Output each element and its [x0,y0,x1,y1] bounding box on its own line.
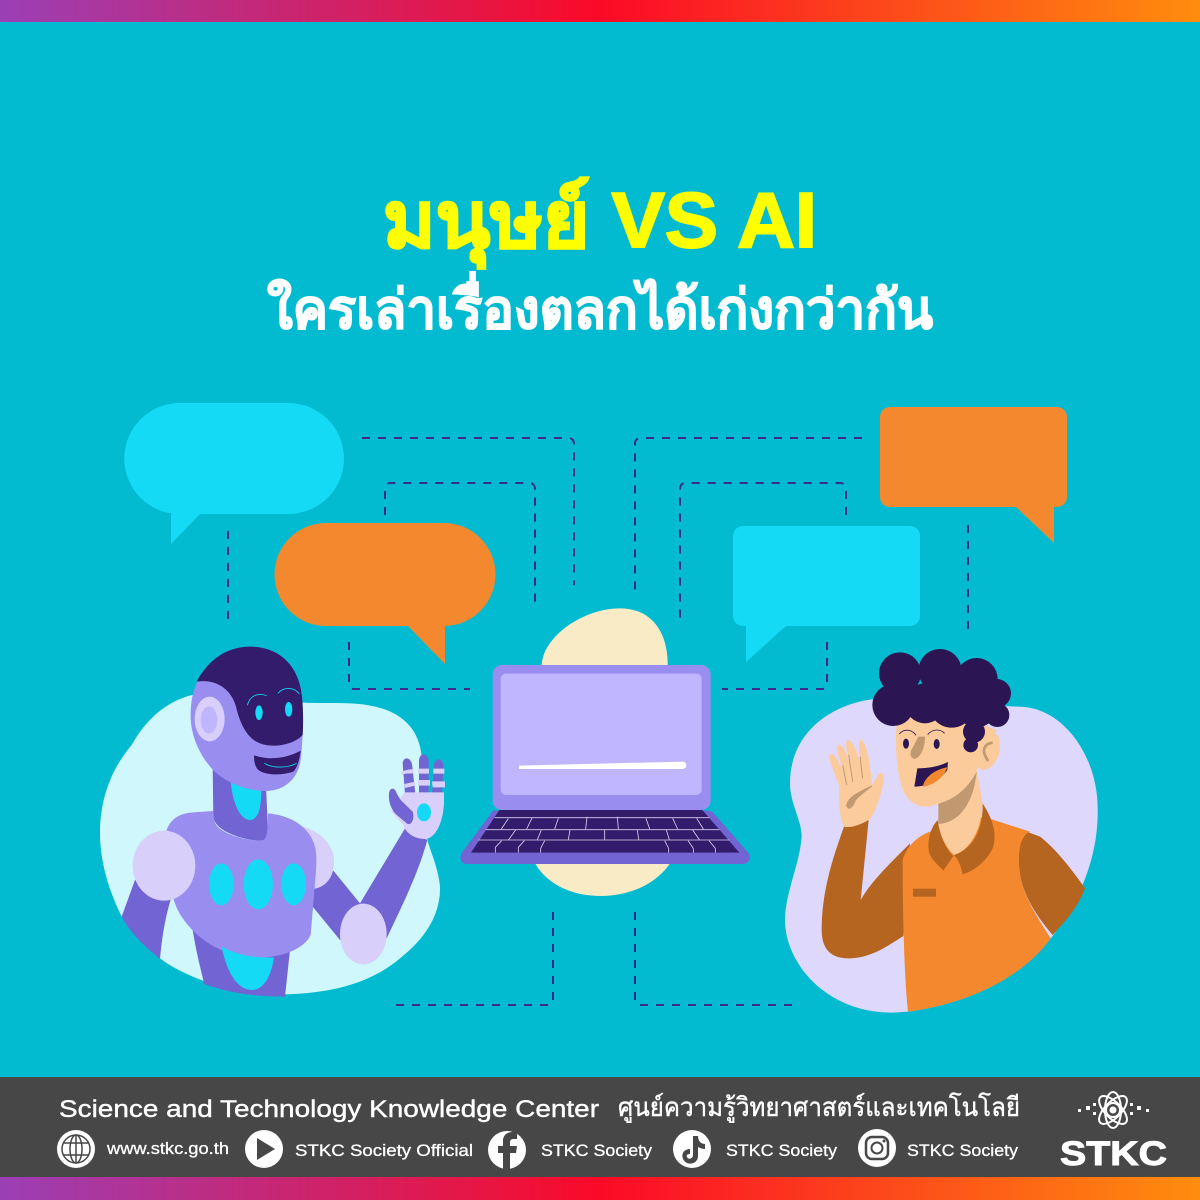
face [896,710,997,807]
pocket [913,889,936,897]
website link [57,1130,229,1168]
tiktok link [673,1130,838,1168]
shoulder right [303,827,334,889]
hair [872,649,1011,752]
instagram link: STKC Society [907,1141,1019,1160]
neck [213,767,268,841]
footer heading thai: ศูนย์ความรู้วิทยาศาสตร์และเทคโนโลยี [618,1092,1020,1123]
keyboard [471,810,739,853]
dark face plate [197,647,303,746]
ear [195,697,225,741]
youtube link: STKC Society Official [295,1141,473,1160]
speech bubble: cyan right [733,526,920,662]
STKC logo: STKC [1060,1135,1167,1173]
chest lights [209,859,306,909]
youtube link [245,1130,473,1168]
inner ear [984,743,993,761]
laptop base [460,811,750,864]
speech bubble: orange right [880,407,1067,543]
robot limbs [122,828,427,997]
laptop screen frame [493,665,711,810]
bottom gradient bar [0,1177,1200,1200]
robot hand [389,754,445,839]
mouth line [264,763,297,767]
brows [899,730,945,735]
robot illustration [100,647,445,997]
laptop illustration [460,608,750,896]
light blob [100,695,440,994]
mouth [254,751,301,774]
palm lines [843,755,872,808]
eyes [255,702,292,720]
neck [938,770,983,855]
laptop screen [501,674,702,795]
cream blob behind laptop [535,608,670,896]
top gradient bar [0,0,1200,22]
tiktok link: STKC Society [726,1141,838,1160]
mouth [914,762,948,787]
subtitle: ใครเล่าเรื่องตลกได้เก่งกว่ากัน [267,271,933,340]
collar [928,803,995,874]
shoulder left [133,831,195,901]
dashed connector lines [228,438,968,1005]
lower belly [222,947,274,990]
neck shadow [938,772,977,824]
head [191,647,303,791]
tongue [923,767,947,787]
website link: www.stkc.go.th [106,1139,229,1158]
instagram link [858,1129,1019,1167]
footer band [0,1077,1200,1177]
title: มนุษย์ VS AI [383,176,817,269]
facebook link [488,1131,653,1169]
orange shirt [903,817,1051,1012]
hand [829,739,884,827]
speech bubble: orange left [274,523,495,664]
brows [247,688,299,705]
lavender blob [785,699,1098,1013]
eyes [903,739,940,749]
torso [167,811,316,958]
STKC logo [1060,1092,1167,1173]
elbow [340,904,387,964]
inner ear [201,706,217,734]
facebook link: STKC Society [541,1141,653,1160]
speech bubble: cyan left [124,403,344,544]
nose [911,737,925,759]
footer heading english: Science and Technology Knowledge Center [59,1096,599,1123]
neck cyan [231,782,261,820]
sleeves [822,820,1085,958]
white progress line [519,762,686,769]
ear [975,733,1000,770]
man illustration [785,649,1098,1013]
